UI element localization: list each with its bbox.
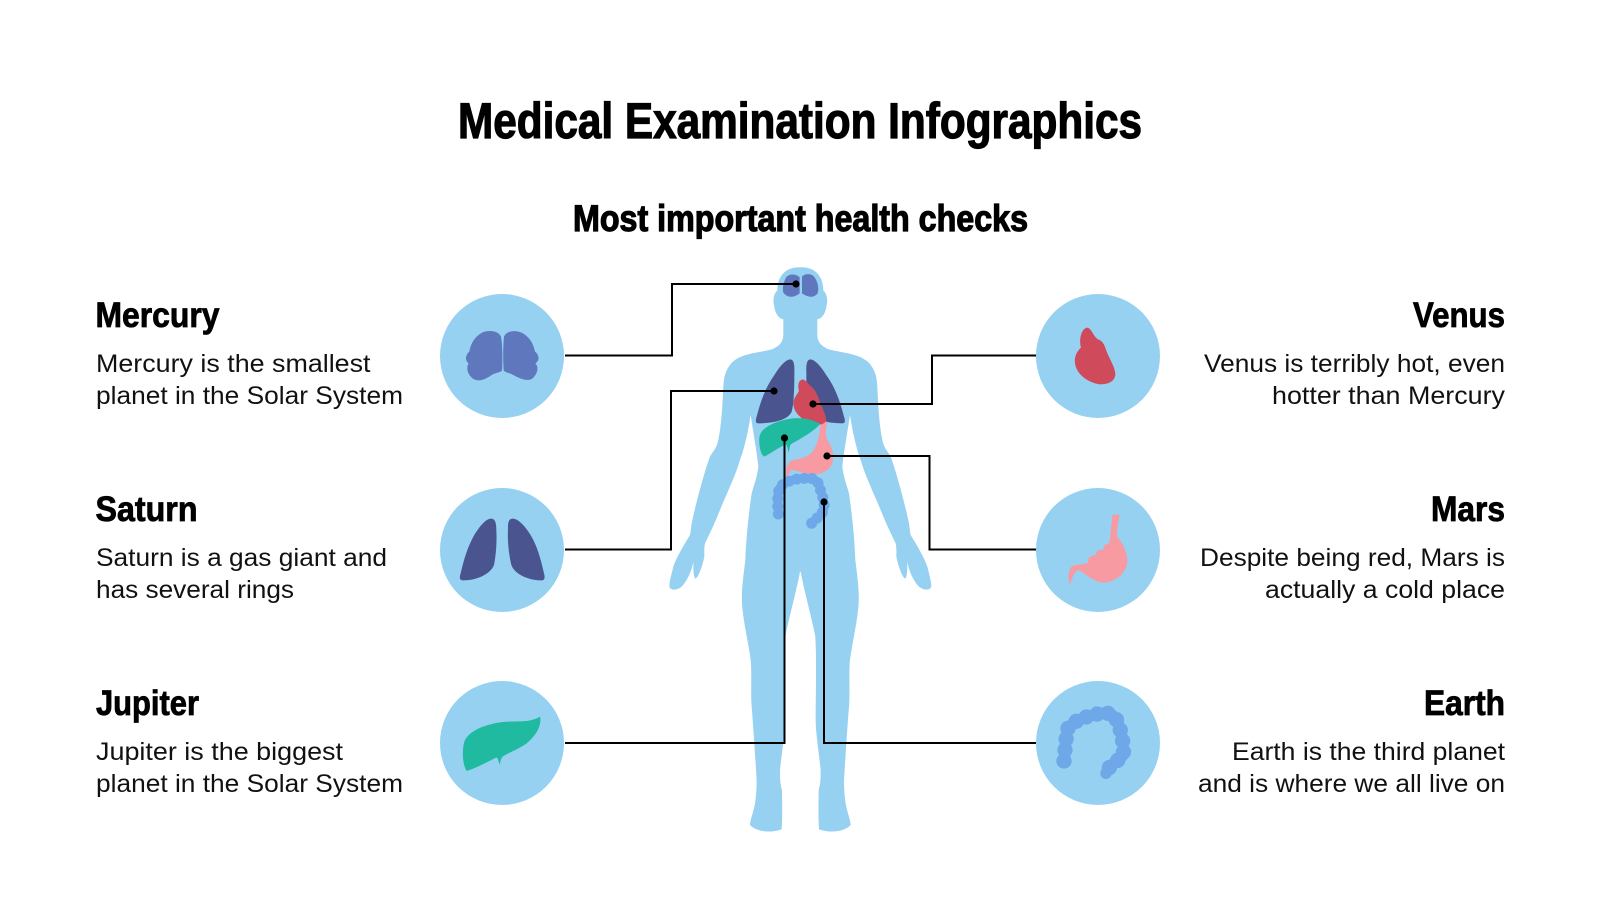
connector: Earth to colon xyxy=(820,498,1036,743)
connector: Jupiter to liver xyxy=(565,434,788,743)
circle: Mercury brain icon xyxy=(440,294,564,418)
text block: Venus: Venus xyxy=(1413,296,1505,335)
text block: Earth: Earth is the third planet xyxy=(1232,738,1505,766)
circle: Saturn lungs icon xyxy=(440,488,564,612)
circle: Mars stomach icon xyxy=(1036,488,1160,612)
text block: Earth: Earth xyxy=(1424,684,1505,723)
text block: Jupiter: planet in the Solar System xyxy=(96,770,403,798)
organ: heart xyxy=(793,379,826,425)
circle: Venus heart icon xyxy=(1036,294,1160,418)
text block: Saturn: Saturn xyxy=(96,490,198,529)
connector: Saturn to lungs xyxy=(565,387,778,550)
text block: Mercury xyxy=(96,296,403,410)
icon: heart xyxy=(1075,328,1115,384)
text block: Mercury: planet in the Solar System xyxy=(96,382,403,410)
circle: Jupiter liver icon xyxy=(440,681,564,805)
text block: Jupiter: Jupiter is the biggest xyxy=(96,738,343,766)
text block: Jupiter: Jupiter xyxy=(96,684,199,723)
icon: lungs xyxy=(460,519,545,580)
organ: brain xyxy=(783,274,818,297)
body silhouette xyxy=(669,267,931,832)
icon: liver xyxy=(463,717,540,771)
text block: Venus xyxy=(1204,296,1506,410)
text block: Saturn: has several rings xyxy=(96,576,294,604)
subtitle: Most important health checks xyxy=(573,198,1028,239)
text block: Mars: actually a cold place xyxy=(1265,576,1505,604)
connector: Venus to heart xyxy=(809,356,1036,408)
text block: Venus: hotter than Mercury xyxy=(1272,382,1506,410)
text block: Earth xyxy=(1198,684,1505,798)
human body with organs xyxy=(669,267,931,832)
text block: Mars xyxy=(1200,490,1505,604)
title: Medical Examination Infographics xyxy=(458,93,1142,149)
text block: Jupiter xyxy=(96,684,403,798)
icon: stomach xyxy=(1069,515,1127,585)
text block: Saturn xyxy=(96,490,387,604)
circle: Earth colon icon xyxy=(1036,681,1160,805)
connector: Mars to stomach xyxy=(823,452,1036,550)
icon: brain xyxy=(466,331,539,380)
text block: Saturn: Saturn is a gas giant and xyxy=(96,544,387,572)
text block: Mercury: Mercury xyxy=(96,296,220,335)
connector: Mercury to brain xyxy=(565,280,800,356)
organ: colon xyxy=(778,478,824,524)
icon: colon xyxy=(1064,713,1123,773)
text block: Mars: Despite being red, Mars is xyxy=(1200,544,1505,572)
text block: Mercury: Mercury is the smallest xyxy=(96,350,371,378)
text block: Mars: Mars xyxy=(1431,490,1505,529)
organ: stomach xyxy=(786,422,833,477)
organ: lungs xyxy=(756,359,845,423)
organ: liver xyxy=(759,418,820,457)
text block: Earth: and is where we all live on xyxy=(1198,770,1505,798)
text block: Venus: Venus is terribly hot, even xyxy=(1204,350,1505,378)
